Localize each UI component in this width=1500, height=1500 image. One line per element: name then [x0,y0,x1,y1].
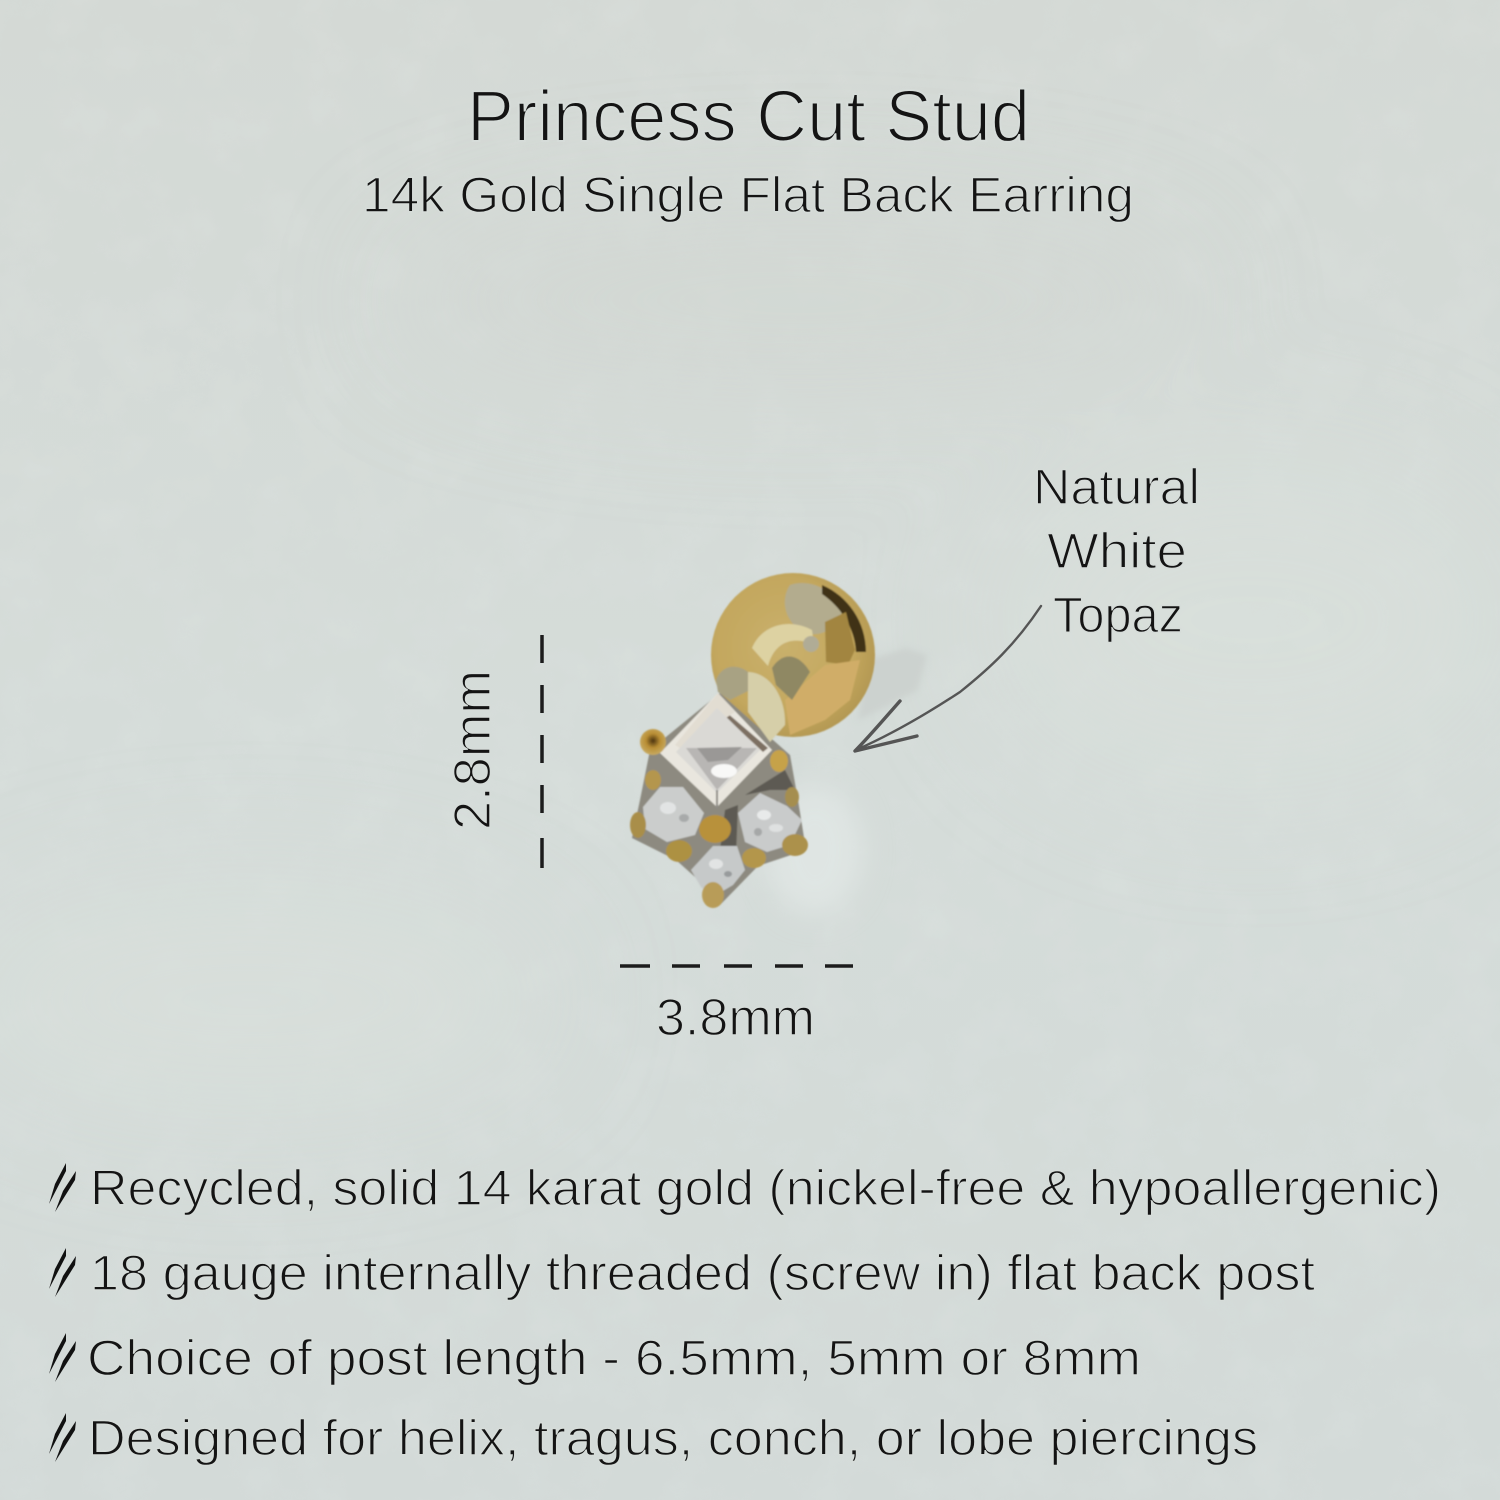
width label: 3.8mm [656,989,815,1047]
small stone bottom [691,846,745,897]
callout label: Natural White Topaz [1033,459,1200,643]
subtitle: 14k Gold Single Flat Back Earring [362,167,1134,223]
feature list [49,1160,1441,1466]
height label: 2.8mm [444,670,502,830]
width dimension line [620,964,853,968]
feature 1 text: Recycled, solid 14 karat gold (nickel-free & hypoallergenic) [90,1160,1441,1216]
bullet 4 [49,1413,76,1462]
feature 3 text: Choice of post length - 6.5mm, 5mm or 8mm [87,1330,1141,1386]
flat back disc [711,573,875,737]
princess cut stone [660,693,772,808]
callout label: Natural White Topaz: Natural [1033,459,1200,515]
bullet 3 [49,1333,76,1382]
title: Princess Cut Stud [467,77,1030,157]
setting dark gaps [720,770,795,880]
stone sparkle [660,802,783,877]
feature 2 text: 18 gauge internally threaded (screw in) flat back post [90,1245,1315,1301]
earring body [630,573,875,908]
small stone left [643,787,704,842]
bullet 1 [49,1163,76,1212]
height dimension line [540,635,544,868]
bullet 2 [49,1248,76,1297]
feature 4 text: Designed for helix, tragus, conch, or lobe piercings [88,1410,1258,1466]
small stone right [738,793,802,852]
gold prongs [630,729,808,908]
post collar [716,667,785,742]
lower setting body [632,693,806,905]
callout label: Natural White Topaz: Topaz [1053,587,1183,643]
translucent backing shadow [767,648,927,915]
callout label: Natural White Topaz: White [1047,523,1187,579]
arrow to stone [855,606,1041,751]
earring photo illustration [630,573,927,915]
